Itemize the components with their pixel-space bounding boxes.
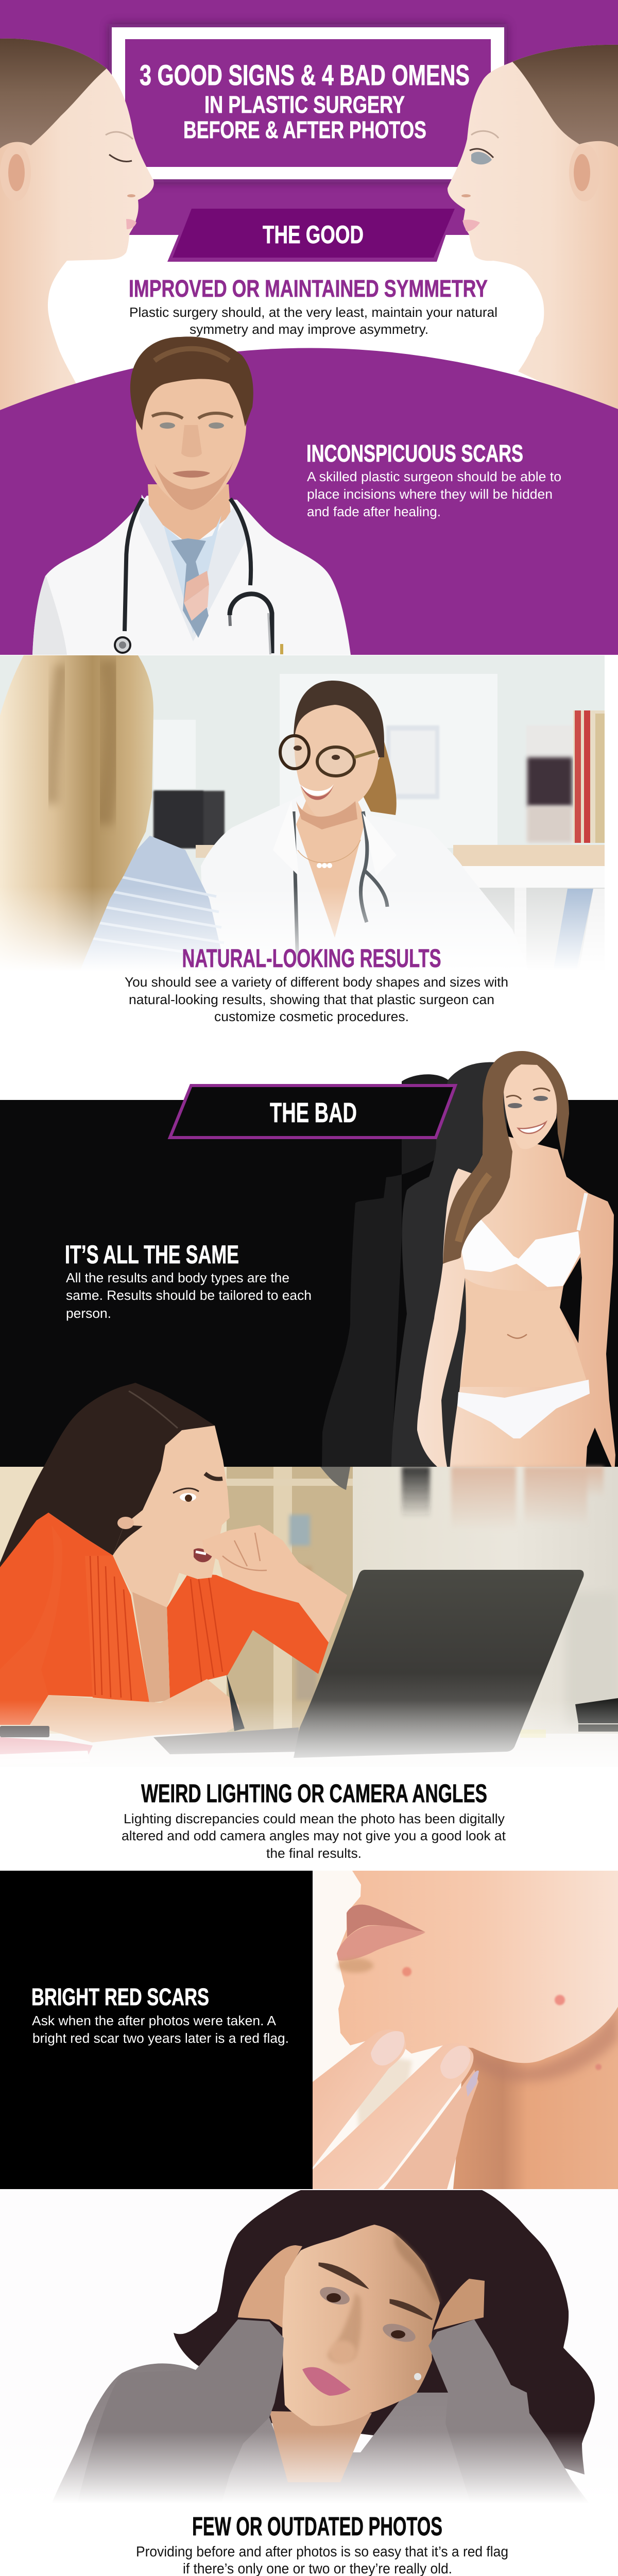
panel: header and the good section [0,0,618,655]
heading: natural-looking results: NATURAL-LOOKING RESULTS [182,944,441,973]
panel: weird lighting or camera angles [0,1383,618,1861]
neck and face [113,1426,230,1703]
hair [174,2190,595,2475]
heading: improved or maintained symmetry: IMPROVED OR MAINTAINED SYMMETRY [129,275,488,302]
body text: same [66,1270,312,1321]
right hand [434,2279,485,2330]
heading: few or outdated photos: FEW OR OUTDATED PHOTOS [192,2512,442,2541]
brows and eyes [319,2263,367,2287]
heading: few or outdated photos [136,2512,508,2576]
body text: photos [136,2544,508,2576]
right sleeve [428,2319,587,2507]
body text: results: You should see a variety of different body shapes and sizes with [125,974,508,990]
long hair behind [0,1383,215,1577]
blemishes [402,1967,411,1976]
body text: lighting [122,1811,506,1861]
body text: same: same. Results should be tailored to each [66,1287,312,1303]
purple arc panel [0,348,618,655]
body text: symmetry: Plastic surgery should, at the very least, maintain your natural [129,304,497,320]
body text: results: natural-looking results, showing that that plastic surgeon can [129,992,494,1007]
orange shirt [0,1513,329,1725]
patient with blonde hair [0,655,227,975]
title frame [109,24,507,182]
photo: male doctor [32,336,351,655]
heading: bright red scars [31,1983,289,2046]
photo: worried woman [0,2189,618,2521]
body text: red scars: bright red scar two years later is a red flag. [32,2030,289,2046]
body text: scars: place incisions where they will be hidden [307,486,553,502]
left sleeve [77,2319,284,2504]
heading: natural-looking results [125,944,508,1024]
body text: scars [307,469,561,519]
shadow silhouettes [322,1062,507,1468]
title text [140,59,470,143]
face [282,2225,440,2426]
neck [453,1999,618,2189]
heading: improved or maintained symmetry [129,275,497,337]
body text: photos: Providing before and after photos is so easy that it’s a red flag [136,2544,508,2560]
lips [347,1905,425,1937]
the good banner: THE GOOD [263,221,364,249]
heading: inconspicuous scars: INCONSPICUOUS SCARS [306,439,523,467]
heading: bright red scars: BRIGHT RED SCARS [31,1983,209,2010]
black panel [0,1871,313,2189]
photo: left woman profile [0,39,154,417]
phone and notebook [0,1726,49,1737]
photo: woman in white underwear [417,1051,615,1473]
table [0,1734,618,1767]
body text: results: customize cosmetic procedures. [214,1009,409,1024]
title text: BEFORE & AFTER PHOTOS [183,116,426,143]
briefs [457,1380,590,1438]
earring [414,2373,421,2380]
panel: few or outdated photos [0,2189,618,2576]
face [504,1064,557,1149]
stray hand shadow [320,1467,350,1490]
purple header background [0,0,618,235]
hair [443,1051,569,1264]
the bad banner [170,1086,455,1138]
body text: lighting: altered and odd camera angles may not give you a good look at [122,1828,506,1843]
the good banner [167,209,455,262]
laptop [153,1727,300,1754]
body text: red scars [32,2013,289,2046]
finger one [313,2029,406,2167]
heading: it's all the same [65,1240,312,1321]
body text: lighting: the final results. [266,1845,362,1861]
body text: same: All the results and body types are the [66,1270,289,1285]
neck [269,2411,372,2482]
photo: consultation with female doctor [0,655,605,976]
body text: symmetry [129,304,497,337]
heading: weird lighting or camera angles [122,1779,506,1861]
black background [0,1100,618,1468]
faded legs from figure above [402,1467,604,1531]
bra [460,1217,580,1287]
body text: symmetry: symmetry and may improve asymmetry. [190,321,428,337]
body text: results [125,974,508,1024]
photo: right woman profile [448,45,618,417]
heading: inconspicuous scars [306,439,561,519]
jaw and cheek [337,1871,618,2063]
panel: the bad, it's all the same [0,1051,618,1473]
body text: same: person. [66,1306,111,1321]
left hand [238,2245,302,2328]
panel: natural-looking results [0,655,605,1024]
body text: lighting: Lighting discrepancies could mean the photo has been digitally [124,1811,505,1826]
finger two [313,2043,473,2189]
the bad banner: THE BAD [270,1097,357,1128]
female doctor [201,681,530,975]
third finger [384,2070,478,2189]
body text: red scars: Ask when the after photos were taken. A [32,2013,277,2028]
title text: IN PLASTIC SURGERY [204,91,405,118]
title text: 3 GOOD SIGNS & 4 BAD OMENS [140,59,470,91]
panel: bright red scars [0,1871,618,2189]
resting arm [30,1679,239,1742]
body text: scars: and fade after healing. [307,504,441,519]
biting hand [202,1525,347,1642]
photo: skin close-up with fingers [313,1871,618,2189]
heading: it's all the same: IT’S ALL THE SAME [65,1240,239,1269]
body text: scars: A skilled plastic surgeon should be able to [307,469,561,484]
photo: woman looking at laptop [0,1383,618,1788]
sweater body [52,2363,590,2504]
